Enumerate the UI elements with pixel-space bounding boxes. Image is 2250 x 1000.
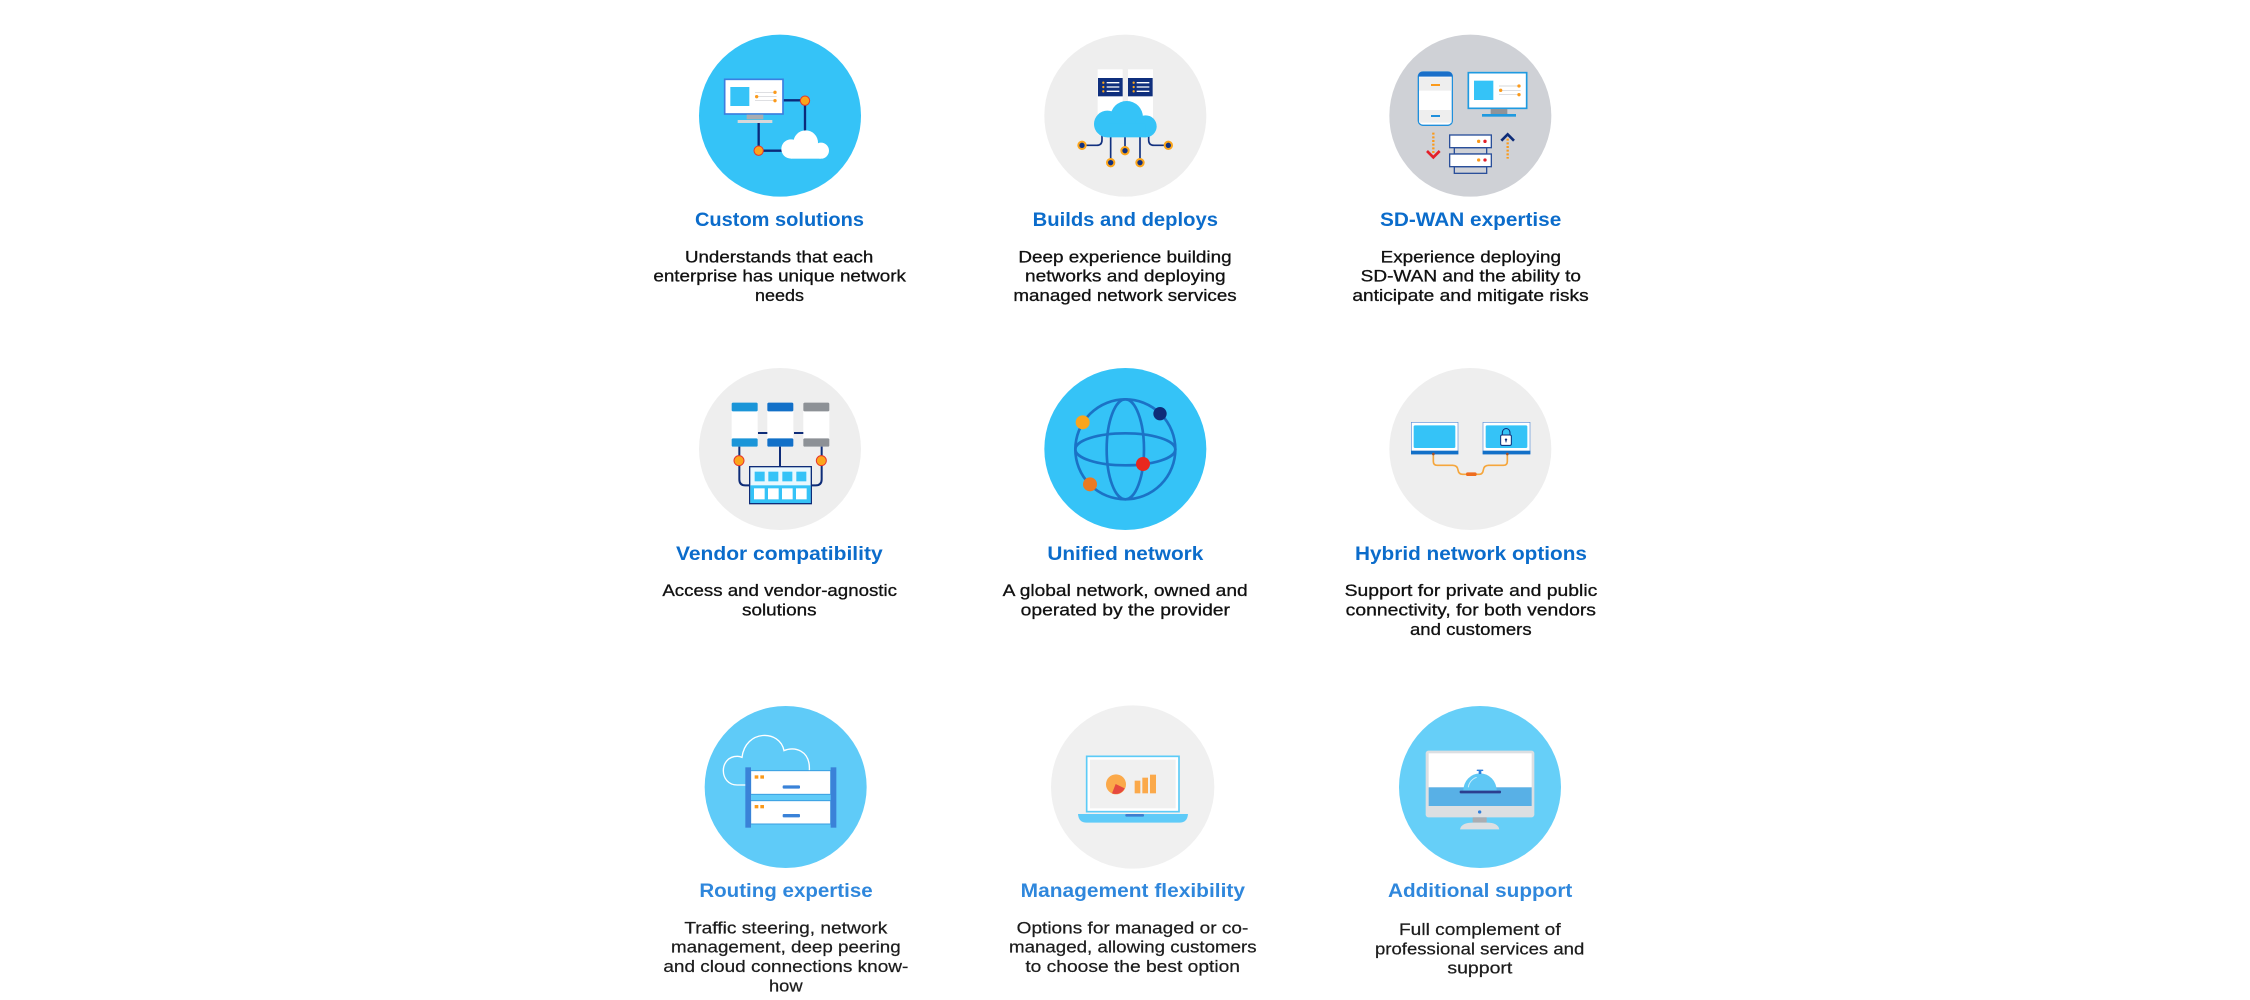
text block: managed network services xyxy=(1013,286,1237,305)
panel: custom solutions xyxy=(653,35,907,305)
heading: Vendor compatibility xyxy=(676,544,883,565)
panel: vendor compatibility xyxy=(662,368,897,619)
panel: routing expertise xyxy=(663,706,908,995)
text block xyxy=(1013,247,1237,305)
heading: Management flexibility xyxy=(1021,881,1245,902)
icon: two laptops with cable and lock xyxy=(1389,368,1551,530)
text block: solutions xyxy=(742,600,817,619)
text block xyxy=(653,247,907,305)
text block: operated by the provider xyxy=(1021,600,1231,619)
panel: unified network xyxy=(1003,368,1248,619)
icon: monitor linked to cloud xyxy=(699,35,861,197)
heading: SD-WAN expertise xyxy=(1380,210,1561,231)
text block: anticipate and mitigate risks xyxy=(1352,286,1589,305)
icon: laptop with charts xyxy=(1051,705,1214,869)
text block: to choose the best option xyxy=(1025,957,1240,976)
heading: Routing expertise xyxy=(699,881,873,902)
heading: Additional support xyxy=(1388,881,1573,902)
text block: SD-WAN and the ability to xyxy=(1361,267,1581,286)
text block xyxy=(1003,581,1248,619)
icon: vendor modules and switch xyxy=(699,368,861,530)
panel: SD-WAN expertise xyxy=(1352,35,1589,305)
heading: Unified network xyxy=(1047,544,1204,565)
text block: Support for private and public xyxy=(1345,581,1597,600)
panel: additional support xyxy=(1375,706,1584,978)
panel: hybrid network options xyxy=(1345,368,1597,639)
text block xyxy=(1375,920,1584,978)
text block: management, deep peering xyxy=(671,938,901,957)
text block: support xyxy=(1447,959,1513,978)
text block: Experience deploying xyxy=(1381,247,1561,266)
icon: phone, monitor and servers xyxy=(1389,35,1551,197)
text block xyxy=(1009,918,1257,976)
text block xyxy=(663,918,908,995)
icon: cloud with servers and nodes xyxy=(1044,35,1206,197)
icon: monitor with service bell xyxy=(1399,706,1561,868)
text block: A global network, owned and xyxy=(1003,581,1248,600)
text block: Options for managed or co- xyxy=(1017,918,1248,937)
panel: management flexibility xyxy=(1009,705,1257,976)
text block: and cloud connections know- xyxy=(663,957,908,976)
text block: enterprise has unique network xyxy=(653,267,907,286)
text block: managed, allowing customers xyxy=(1009,938,1257,957)
text block: how xyxy=(769,976,804,995)
text block xyxy=(1345,581,1597,639)
text block xyxy=(1352,247,1589,305)
text block: and customers xyxy=(1410,620,1532,639)
text block: connectivity, for both vendors xyxy=(1346,600,1596,619)
heading: Builds and deploys xyxy=(1033,210,1218,231)
icon: globe with nodes xyxy=(1044,368,1206,530)
heading: Custom solutions xyxy=(695,210,864,231)
text block xyxy=(662,581,897,619)
text block: networks and deploying xyxy=(1025,267,1226,286)
text block: Understands that each xyxy=(685,247,873,266)
text block: Full complement of xyxy=(1399,920,1561,939)
text block: professional services and xyxy=(1375,939,1584,958)
text block: needs xyxy=(755,286,804,305)
icon: server rack with cloud xyxy=(705,706,867,868)
heading: Hybrid network options xyxy=(1355,544,1587,565)
text block: Access and vendor-agnostic xyxy=(662,581,897,600)
panel: builds and deploys xyxy=(1013,35,1237,305)
text block: Traffic steering, network xyxy=(684,918,888,937)
text block: Deep experience building xyxy=(1018,247,1232,266)
